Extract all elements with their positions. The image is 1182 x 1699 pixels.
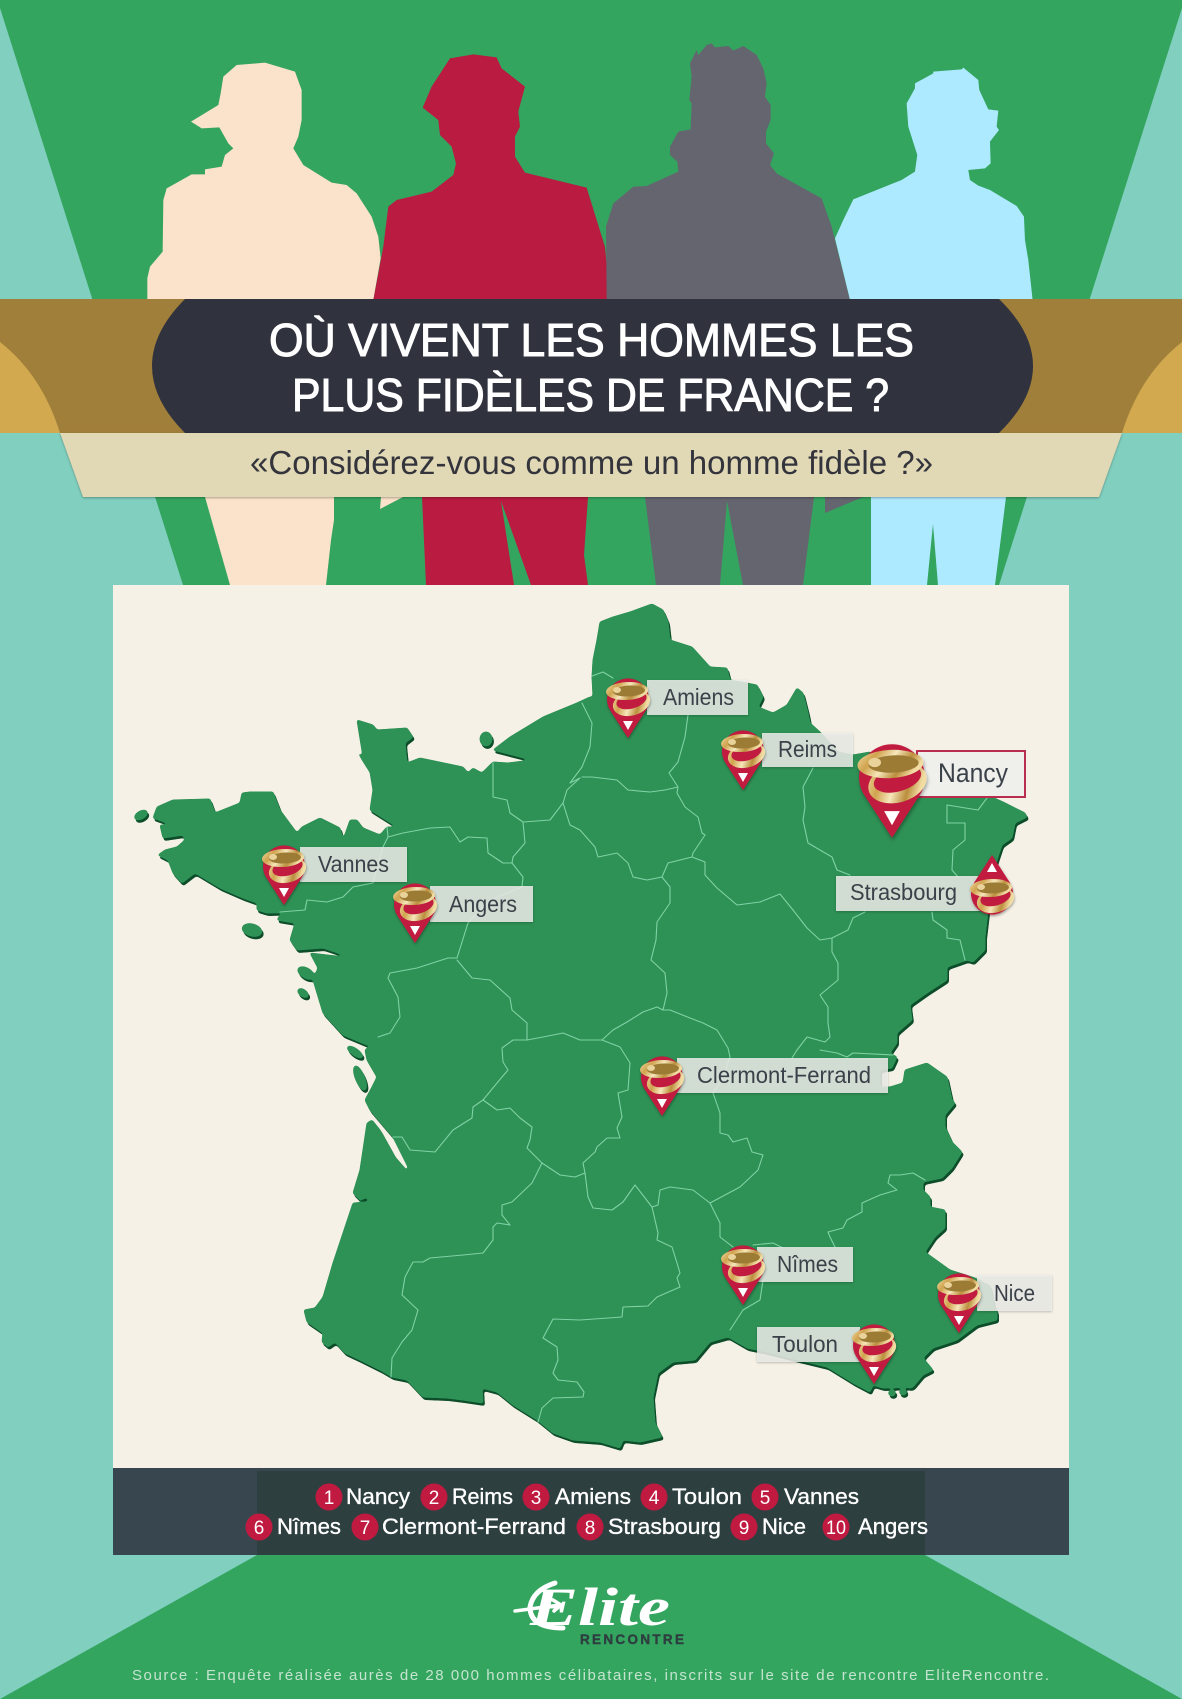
- map: France: [133, 604, 1027, 1448]
- pin: Nice: Nice: [994, 1280, 1035, 1306]
- pin: Angers: [393, 883, 533, 943]
- hand: beige man: [380, 497, 403, 509]
- rank 3 Amiens: [522, 1484, 631, 1510]
- rank 9 Nice: Nice: [762, 1514, 806, 1539]
- background: green top spotlight: [0, 0, 1182, 585]
- pin: Nancy: [857, 744, 1025, 838]
- pin: Reims: Reims: [778, 736, 837, 762]
- hand: grey man: [825, 497, 863, 513]
- rank 2 Reims: Reims: [452, 1484, 513, 1509]
- rank 3 Amiens: Amiens: [555, 1484, 631, 1509]
- rank 10 Angers: Angers: [858, 1514, 928, 1539]
- pin: Vannes: Vannes: [318, 851, 389, 877]
- pin: Amiens: Amiens: [663, 684, 734, 710]
- legs: light blue man: [871, 497, 1006, 585]
- rank 8 Strasbourg: 8: [585, 1518, 595, 1539]
- logo: Elite Rencontre: RENCONTRE: [580, 1632, 684, 1647]
- rank 6 Nîmes: Nîmes: [277, 1514, 341, 1539]
- rank 4 Toulon: 4: [649, 1488, 660, 1509]
- rank 4 Toulon: Toulon: [672, 1484, 742, 1509]
- pin: Nice: [937, 1273, 1052, 1333]
- title plate: [152, 299, 1033, 433]
- pin: Angers: Angers: [449, 891, 517, 917]
- map: region borders: [280, 672, 987, 1422]
- legs: beige man: [205, 497, 334, 585]
- subtitle ribbon: [60, 433, 1122, 497]
- logo: Elite Rencontre: [515, 1577, 684, 1647]
- rank 9 Nice: [730, 1514, 806, 1540]
- background: green bottom spotlight: [0, 1555, 1182, 1699]
- pin: Toulon: Toulon: [772, 1331, 838, 1357]
- rank 2 Reims: 2: [429, 1488, 439, 1509]
- subtitle: «Considérez-vous comme un homme fidèle ?»: [250, 444, 933, 481]
- silhouette: crimson man: [373, 54, 608, 300]
- legs: grey man: [645, 497, 814, 585]
- pin: Clermont-Ferrand: [640, 1056, 888, 1116]
- rank 1 Nancy: Nancy: [346, 1484, 410, 1509]
- rank 7 Clermont-Ferrand: 7: [360, 1518, 370, 1539]
- silhouette: grey man: [606, 43, 850, 300]
- rank 8 Strasbourg: Strasbourg: [608, 1514, 721, 1539]
- rank 5 Vannes: Vannes: [784, 1484, 859, 1509]
- pin: Nancy: Nancy: [938, 758, 1008, 788]
- ranking list: [246, 1484, 928, 1540]
- panel: map background: [113, 585, 1069, 1468]
- pin: Reims: [721, 730, 853, 790]
- pin: Nîmes: Nîmes: [777, 1251, 838, 1277]
- logo arrows: [515, 1583, 563, 1628]
- pin: Clermont-Ferrand: Clermont-Ferrand: [697, 1062, 871, 1088]
- rank 10 Angers: 10: [826, 1518, 846, 1539]
- rank 2 Reims: [420, 1484, 513, 1510]
- title: [269, 314, 914, 421]
- rank 6 Nîmes: [246, 1514, 341, 1540]
- pin: Toulon: [757, 1324, 899, 1384]
- logo: Elite Rencontre: Elite: [529, 1577, 670, 1637]
- panel: ranking bar: [113, 1468, 1069, 1555]
- rank 9 Nice: 9: [739, 1518, 749, 1539]
- pin: Vannes: [262, 845, 407, 905]
- silhouettes: four men upper bodies: [147, 43, 1033, 300]
- silhouettes: legs: [205, 497, 1006, 585]
- pin: Strasbourg: [836, 855, 1017, 917]
- rank 5 Vannes: 5: [760, 1488, 770, 1509]
- pin: Amiens: [606, 678, 748, 738]
- rank 6 Nîmes: 6: [254, 1518, 264, 1539]
- gold corner left: [0, 342, 60, 433]
- pin: Strasbourg: Strasbourg: [850, 879, 957, 905]
- rank 4 Toulon: [640, 1484, 742, 1510]
- rank 8 Strasbourg: [576, 1514, 721, 1540]
- map land and islands: [133, 604, 1027, 1448]
- gold corner right: [1122, 342, 1182, 433]
- rank 7 Clermont-Ferrand: Clermont-Ferrand: [382, 1514, 566, 1539]
- legs: crimson man: [422, 497, 588, 585]
- rank 5 Vannes: [752, 1484, 859, 1510]
- title: OÙ VIVENT LES HOMMES LES: [269, 314, 914, 366]
- silhouette: light blue man: [835, 68, 1033, 300]
- rank 10 Angers: [822, 1514, 928, 1540]
- source note: Source : Enquête réalisée aurès de 28 000 hommes célibataires, inscrits sur le site de rencontre EliteRencontre.: [132, 1667, 1049, 1684]
- rank 3 Amiens: 3: [531, 1488, 541, 1509]
- silhouette: beige man: [147, 63, 381, 300]
- rank 1 Nancy: 1: [324, 1488, 334, 1509]
- title: PLUS FIDÈLES DE FRANCE ?: [292, 369, 889, 421]
- rank 1 Nancy: [316, 1484, 410, 1510]
- pin: Nîmes: [721, 1245, 853, 1305]
- title band: [0, 299, 1182, 433]
